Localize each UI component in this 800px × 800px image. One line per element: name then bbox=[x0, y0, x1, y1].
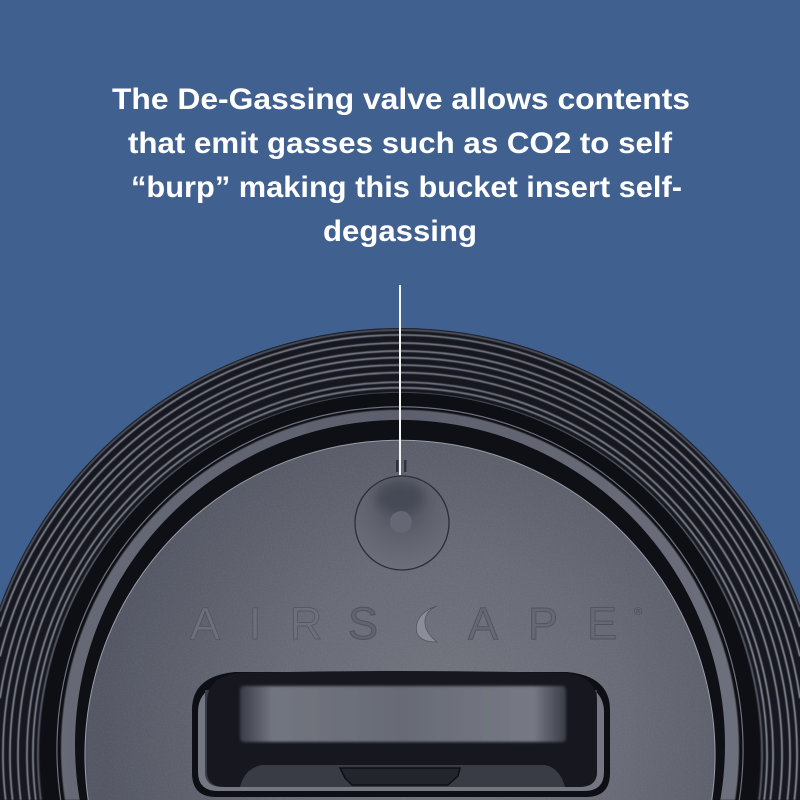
embossed AIRSCAPE logo: P bbox=[528, 598, 558, 649]
lid: dark channel bbox=[40, 393, 760, 800]
lid: channel edge highlight bbox=[57, 407, 743, 800]
embossed AIRSCAPE logo: R bbox=[290, 598, 322, 649]
embossed AIRSCAPE logo: E bbox=[587, 598, 617, 649]
embossed AIRSCAPE logo: I bbox=[249, 598, 261, 649]
handle grip bbox=[207, 671, 597, 787]
vent marks above valve bbox=[396, 460, 406, 472]
lid handle bbox=[192, 671, 610, 797]
heading text: that emit gasses such as CO2 to self bbox=[128, 127, 673, 160]
registered mark: ® bbox=[634, 606, 642, 618]
heading text: “burp” making this bucket insert self- bbox=[131, 171, 682, 204]
lid: ridge highlights bbox=[0, 330, 800, 800]
pointer line bbox=[399, 285, 401, 475]
crescent letter C bbox=[416, 606, 437, 642]
embossed AIRSCAPE logo: S bbox=[348, 598, 378, 649]
handle recess bbox=[192, 672, 610, 797]
lid: grey rim band bbox=[61, 410, 739, 800]
recess floor bbox=[205, 690, 597, 787]
embossed AIRSCAPE logo: A bbox=[468, 598, 498, 649]
embossed AIRSCAPE logo bbox=[190, 598, 642, 649]
de-gassing valve bbox=[355, 476, 449, 570]
embossed AIRSCAPE logo: A bbox=[190, 598, 220, 649]
handle latch notch bbox=[340, 768, 460, 785]
handle lining bbox=[198, 690, 604, 791]
heading text bbox=[112, 83, 690, 248]
lid: ribbed outer ring bbox=[0, 328, 800, 800]
heading text: The De-Gassing valve allows contents bbox=[112, 83, 690, 116]
handle top face bbox=[240, 686, 566, 742]
lid: center plate bbox=[85, 440, 715, 800]
lid: black groove bbox=[75, 420, 725, 800]
heading text: degassing bbox=[323, 215, 477, 248]
lid: plate edge highlight bbox=[85, 440, 715, 800]
